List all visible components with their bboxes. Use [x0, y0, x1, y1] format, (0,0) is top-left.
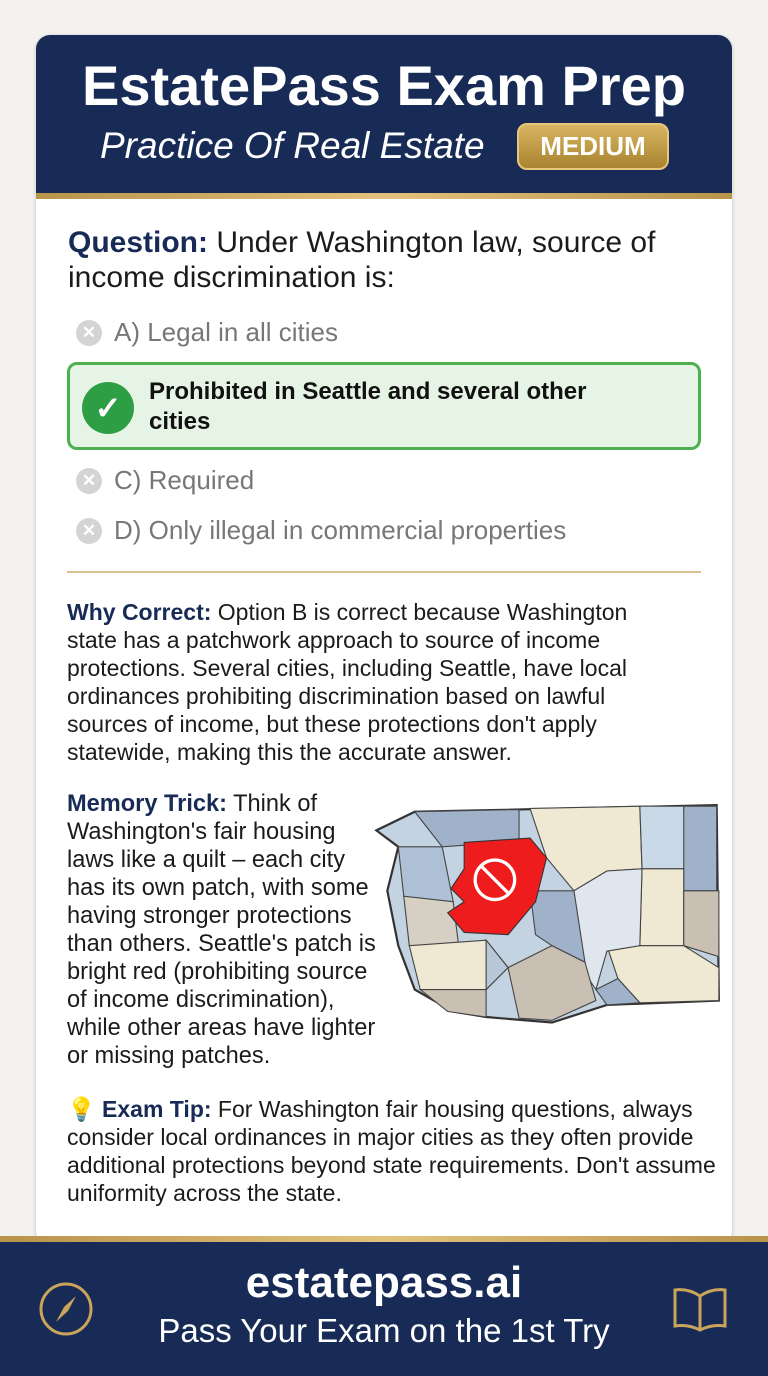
memory trick: Memory Trick: Think of Washington's fair housing laws like a quilt – each city has its own patch, with some having stronger protections than others. Seattle's patch is bright red (prohibiting source of income discrimination), while other areas have lighter or missing patches.	[67, 791, 376, 1069]
icon: book	[674, 1288, 726, 1332]
icon: check	[82, 382, 134, 434]
header	[36, 35, 732, 193]
map: washington	[374, 804, 720, 1024]
footer	[0, 1236, 768, 1376]
option A: A) Legal in all cities	[114, 317, 338, 347]
subtitle: Practice Of Real Estate	[100, 125, 485, 166]
option B correct	[67, 362, 701, 450]
why correct: Why Correct: Option B is correct because Washington state has a patchwork approach to source of income protections. Several cities, including Seattle, have local ordinances prohibiting discrimination based on lawful sources of income, but these protections don't apply statewide, making this the accurate answer.	[67, 599, 627, 765]
option C: ✕	[82, 470, 96, 490]
badge: medium	[517, 123, 669, 170]
option D: ✕	[82, 520, 96, 540]
question: Question: Under Washington law, source of income discrimination is:	[68, 226, 655, 294]
footer tagline: Pass Your Exam on the 1st Try	[158, 1312, 610, 1349]
option D: D) Only illegal in commercial properties	[114, 515, 566, 545]
title: EstatePass Exam Prep	[82, 54, 686, 117]
option B correct: Prohibited in Seattle and several other cities	[149, 378, 586, 435]
icon: check: ✓	[95, 390, 121, 426]
icon: compass	[40, 1282, 92, 1336]
option A: ✕	[82, 322, 96, 342]
card	[36, 35, 732, 1245]
footer title: estatepass.ai	[246, 1258, 522, 1307]
exam tip: 💡 Exam Tip: For Washington fair housing questions, always consider local ordinances in major cities as they often provide additional protections beyond state requirements. Don't assume uniformity across the state.	[67, 1096, 716, 1206]
badge: medium: MEDIUM	[540, 131, 646, 161]
option C: C) Required	[114, 465, 254, 495]
